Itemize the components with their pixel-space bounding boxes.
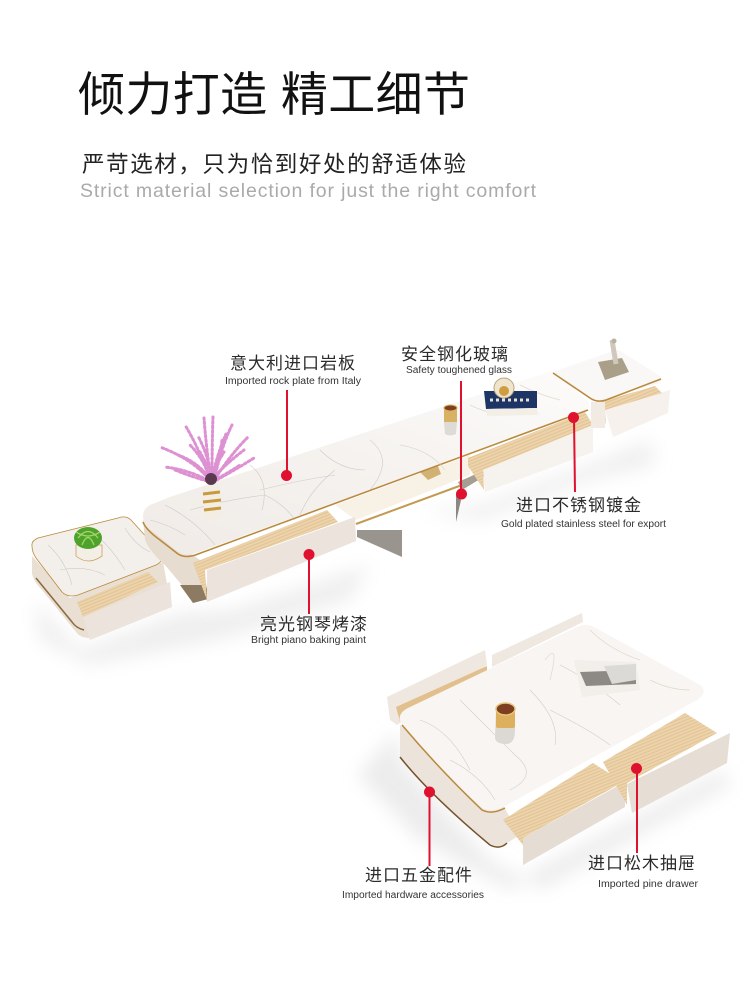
gold cup <box>444 405 457 436</box>
leader line <box>574 418 575 492</box>
left drawer front <box>207 517 356 602</box>
vase <box>495 703 515 744</box>
marble slab <box>143 371 589 555</box>
glass shelf back <box>335 455 470 520</box>
books <box>484 378 538 416</box>
right drawer front <box>627 733 730 813</box>
callout: piano paint <box>251 549 367 646</box>
right drawer front <box>483 425 593 492</box>
marble veins <box>420 665 620 800</box>
leader line <box>308 555 310 614</box>
leader line <box>428 792 430 866</box>
gray glass panel <box>357 530 402 557</box>
drawer front <box>605 390 670 437</box>
marble top <box>400 625 704 811</box>
label en: Imported rock plate from Italy <box>225 376 361 387</box>
table body <box>400 725 520 847</box>
furniture: tv cabinet set <box>32 338 670 665</box>
cabinet body left <box>143 520 210 600</box>
label cn: 进口松木抽屉 <box>588 854 695 873</box>
label cn: 意大利进口岩板 <box>230 354 355 373</box>
dot <box>424 786 435 798</box>
label cn: 进口五金配件 <box>365 866 472 885</box>
callout: glass <box>401 345 512 500</box>
callout: pine drawer <box>588 763 699 890</box>
dot <box>304 549 314 560</box>
marble top <box>553 350 661 401</box>
right drawer interior <box>603 713 717 805</box>
left drawer interior <box>193 510 338 600</box>
statue <box>598 338 629 380</box>
label cn: 进口不锈钢镀金 <box>516 496 641 515</box>
marble gold veins <box>545 630 690 690</box>
left side table <box>32 517 172 640</box>
subtitle: 严苛选材，只为恰到好处的舒适体验 <box>82 152 466 177</box>
label en: Safety toughened glass <box>406 365 512 376</box>
title: 倾力打造 精工细节 <box>78 68 470 121</box>
succulent plant <box>74 527 102 561</box>
leader line <box>636 768 638 853</box>
flower vase <box>203 485 221 520</box>
bottom gold trim <box>400 757 507 847</box>
left drawer interior <box>503 763 623 845</box>
drawer interior <box>600 386 662 425</box>
slab gold trim <box>143 410 588 556</box>
flower stems <box>205 473 217 485</box>
glass gold shelf <box>356 485 462 524</box>
label en: Bright piano baking paint <box>251 635 366 646</box>
magazine <box>574 660 640 697</box>
drawer front <box>83 582 172 640</box>
floor shadows <box>35 440 655 665</box>
dot <box>568 412 579 423</box>
callout: rock plate <box>225 354 361 481</box>
pink flowers <box>160 416 254 482</box>
callout: stainless steel <box>501 412 666 530</box>
english subtitle: Strict material selection for just the right comfort <box>80 180 537 202</box>
main cabinet <box>143 371 593 603</box>
left drawer front <box>523 782 625 865</box>
floor shadow <box>358 730 730 890</box>
dot <box>456 488 467 500</box>
gold block under shelf <box>420 466 441 480</box>
back drawer right <box>492 613 583 667</box>
leader line <box>286 390 288 476</box>
glass edge sliver <box>456 494 461 522</box>
label cn: 亮光钢琴烤漆 <box>260 615 367 634</box>
back drawer left <box>387 650 487 725</box>
dot <box>631 763 642 774</box>
label en: Imported pine drawer <box>598 879 699 890</box>
gold plinth <box>180 585 212 603</box>
dot <box>281 470 292 481</box>
drawer interior <box>77 572 158 617</box>
top trim <box>402 725 505 812</box>
callout: hardware <box>342 786 484 901</box>
table body <box>32 556 170 638</box>
furniture: coffee table <box>358 613 730 890</box>
leader line <box>460 381 462 494</box>
label en: Gold plated stainless steel for export <box>501 519 666 530</box>
table leg <box>591 402 605 428</box>
label en: Imported hardware accessories <box>342 890 484 901</box>
label cn: 安全钢化玻璃 <box>401 345 508 364</box>
right side table <box>553 338 670 437</box>
right drawer interior <box>468 412 593 490</box>
marble top <box>32 517 162 596</box>
